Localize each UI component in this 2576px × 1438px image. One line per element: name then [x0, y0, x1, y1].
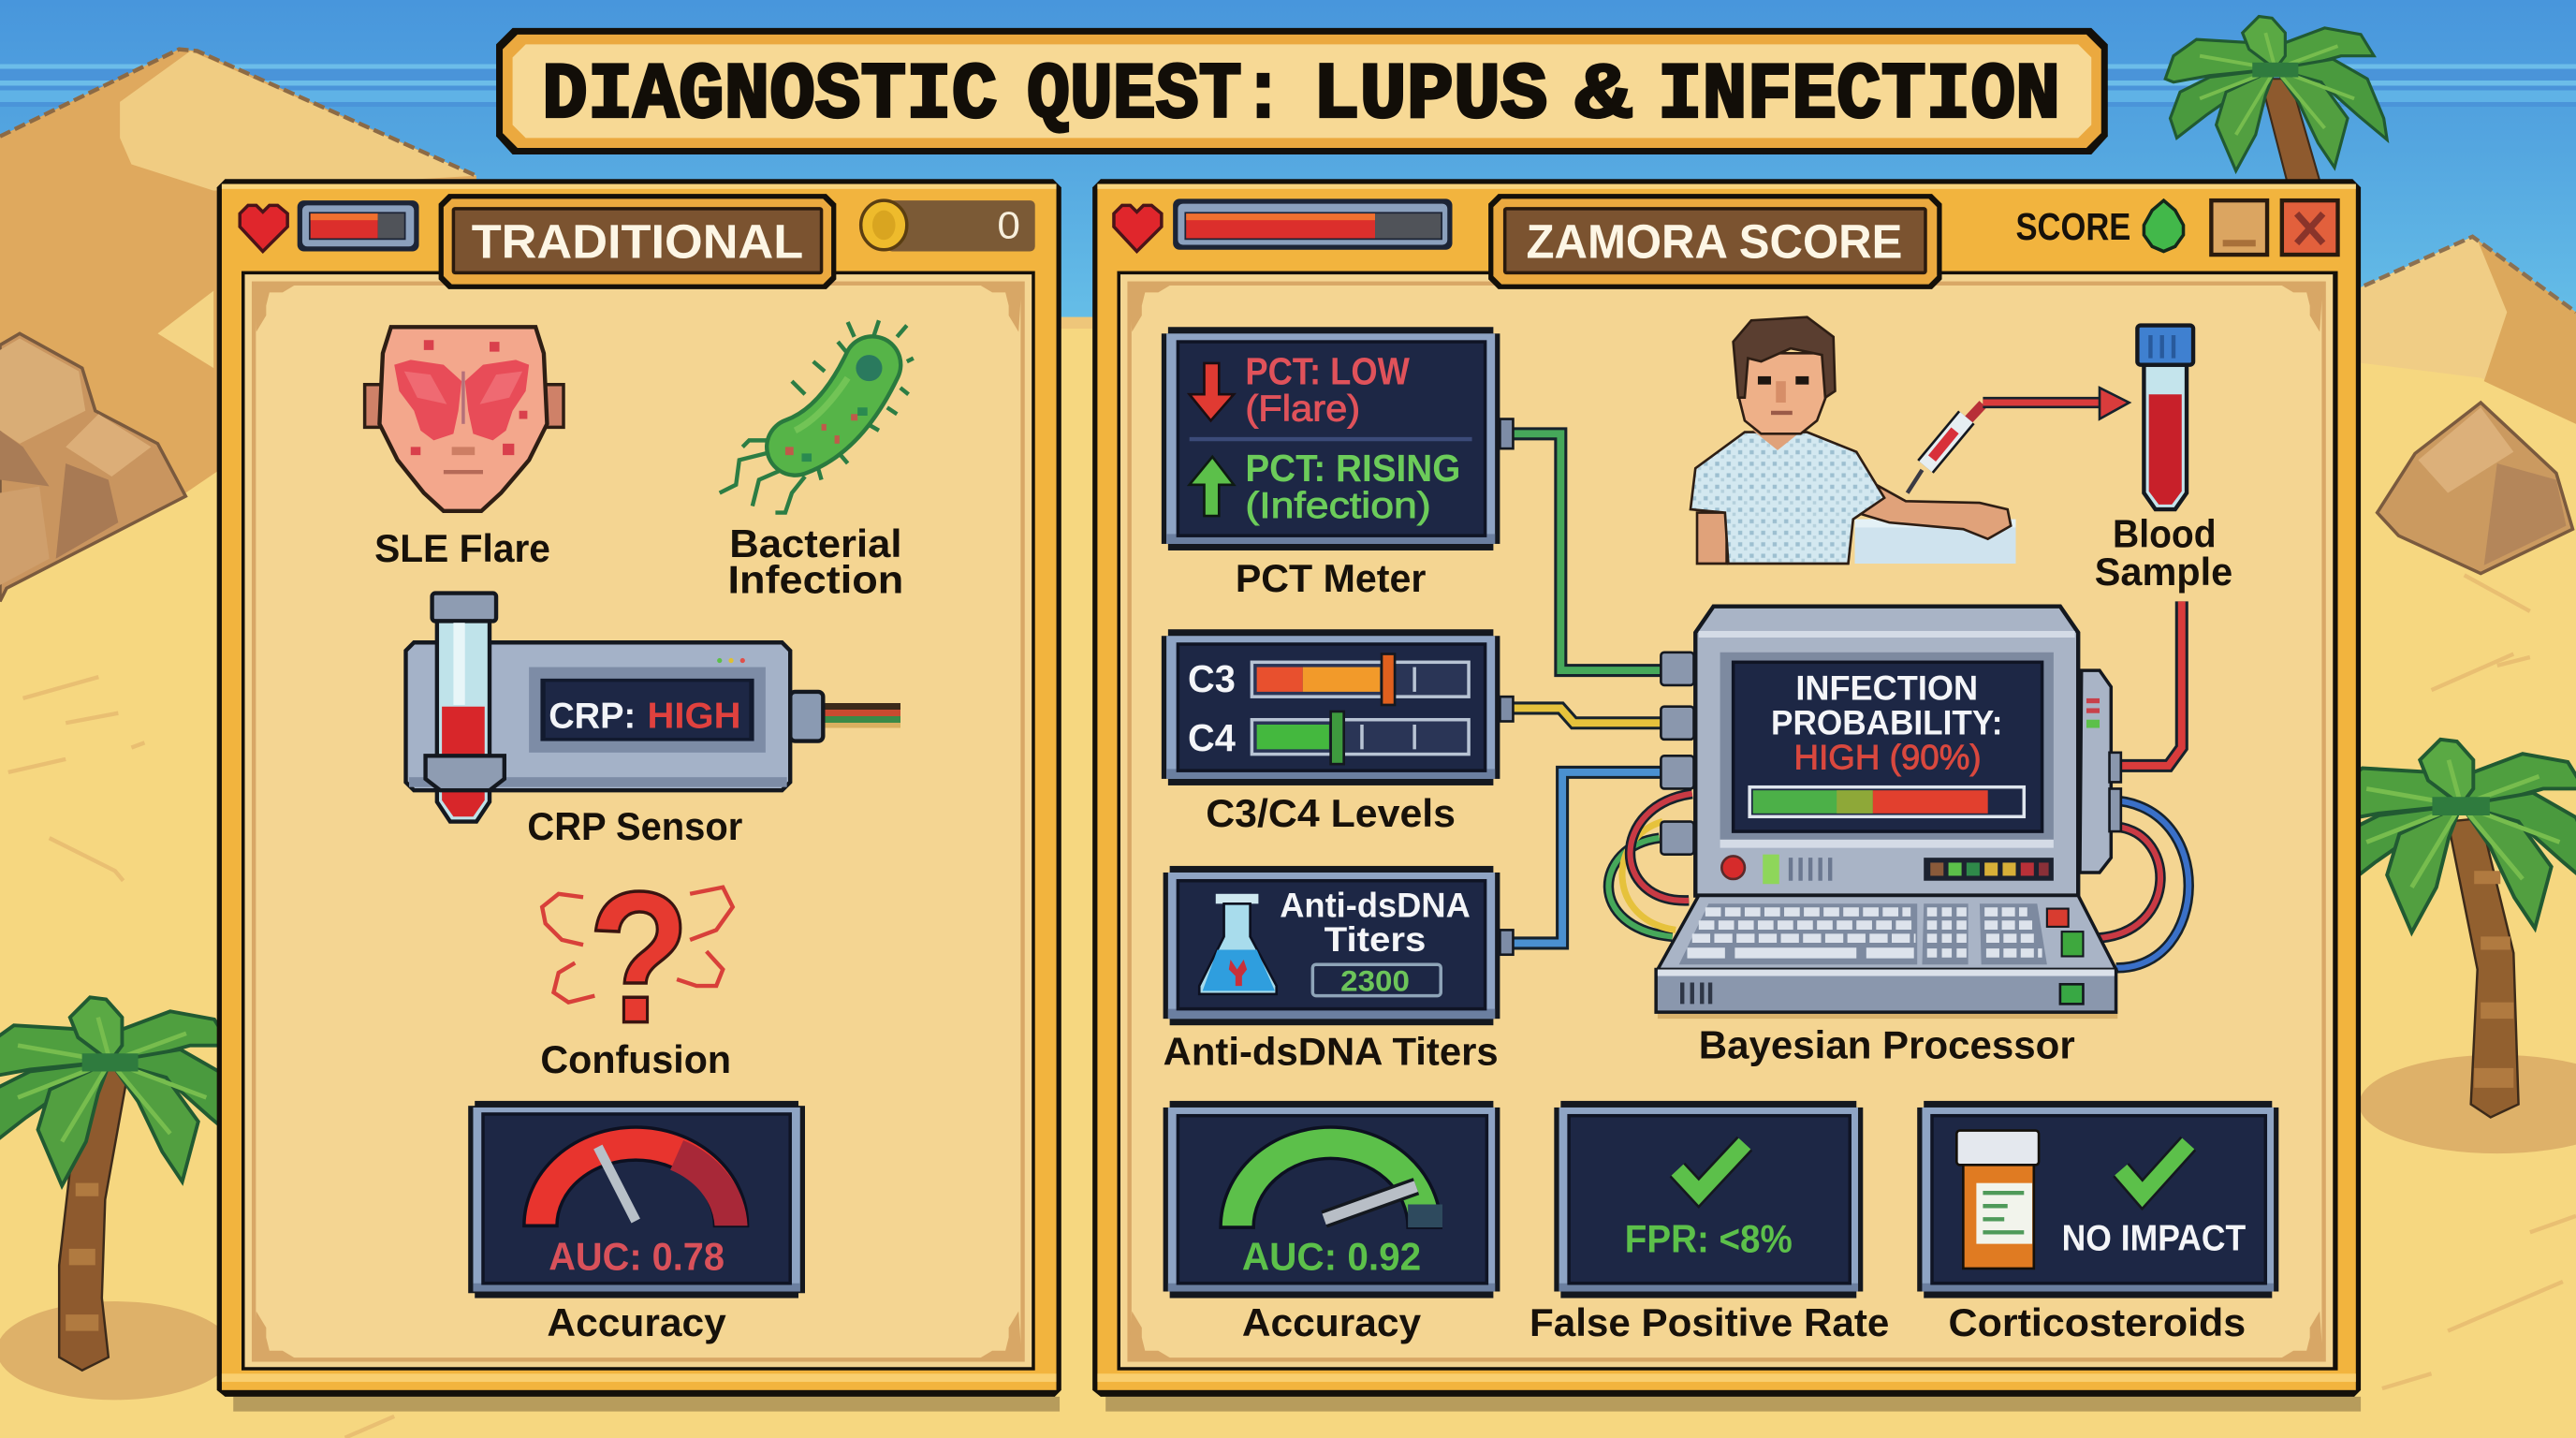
anti-dsDNA panel [1164, 866, 1513, 1025]
test tube [426, 594, 505, 822]
header: tab zamora score [1488, 194, 1942, 289]
header: coin [861, 200, 907, 250]
header: heart zamora [1114, 205, 1162, 252]
label: PCT Meter: PCT Meter [1236, 556, 1426, 600]
wires to processor [1513, 433, 2188, 968]
sensor wires [822, 703, 900, 728]
title banner [496, 28, 2108, 154]
icon: check mark [1677, 1144, 1745, 1193]
wire: blood sample red [2115, 601, 2182, 766]
icon: SLE face with butterfly rash [365, 327, 564, 511]
readout FPR: FPR: <8% [1625, 1216, 1793, 1260]
header: tab traditional [439, 194, 836, 289]
panel: corticosteroids [1917, 1101, 2278, 1299]
icon: flask [1199, 894, 1277, 994]
icon: blood sample tube [2137, 326, 2193, 509]
text: PCT low: PCT: LOW [1245, 350, 1411, 393]
header: health bar zamora [1173, 198, 1453, 250]
side unit [2080, 670, 2111, 873]
wire: C3/C4 yellow [1513, 708, 1662, 723]
arrow: PCT rising up [1190, 457, 1234, 516]
text: anti-dsDNA titers: Titers [1325, 920, 1426, 959]
panel frame: traditional [217, 179, 1061, 1412]
tab text traditional: TRADITIONAL [472, 215, 803, 269]
tab text zamora: ZAMORA SCORE [1526, 215, 1902, 269]
panel frame: zamora [1092, 179, 2361, 1412]
label: Bayesian Processor: Bayesian Processor [1699, 1022, 2075, 1066]
label C4: C4 [1188, 716, 1236, 759]
label: SLE Flare: SLE Flare [374, 526, 550, 570]
label: Blood Sample: Blood [2113, 511, 2217, 555]
label: Accuracy traditional: Accuracy [547, 1300, 726, 1344]
icon: confusion question mark: ? [588, 854, 690, 1063]
gauge panel: AUC 0.92 [1164, 1101, 1500, 1299]
label: Bacterial Infection: Infection [728, 558, 903, 602]
text: anti-dsDNA titers: Anti-dsDNA [1280, 886, 1471, 924]
monitor [1695, 607, 2078, 896]
background: sand ground [0, 317, 2576, 1438]
panel: false positive rate [1554, 1101, 1863, 1299]
control strip [1721, 855, 2054, 884]
screen text: infection probability: HIGH (90%) [1794, 738, 1982, 776]
wire: PCT green [1513, 433, 1662, 670]
readout 2300: 2300 [1340, 963, 1410, 997]
header: score label: SCORE [2016, 205, 2130, 248]
screen text: infection probability [1771, 669, 2002, 776]
computer base [1656, 970, 2116, 1012]
label: Bacterial Infection: Bacterial [729, 521, 902, 565]
background: left rocks [0, 333, 185, 601]
background: dune gap strip [1060, 317, 1092, 329]
label: Bacterial Infection [728, 521, 903, 602]
label: False Positive Rate: False Positive Rate [1530, 1300, 1889, 1344]
text: no impact: NO IMPACT [2062, 1219, 2247, 1259]
slider C3 [1251, 654, 1469, 705]
CRP readout [549, 697, 741, 737]
title text: INFECTION [1658, 52, 2060, 141]
label: Blood Sample: Sample [2095, 550, 2232, 594]
wire loops: right [2097, 800, 2188, 968]
title text: QUEST: [1027, 52, 1284, 141]
label: Anti-dsDNA Titers: Anti-dsDNA Titers [1164, 1029, 1499, 1073]
title text: & [1575, 52, 1632, 141]
button: close [2282, 200, 2338, 255]
label: Blood Sample [2095, 511, 2232, 594]
Bayesian processor computer [1656, 607, 2121, 1019]
gauge panel: AUC 0.78 [468, 1101, 805, 1299]
text: PCT low: (Flare) [1245, 389, 1360, 429]
header: score bar [887, 200, 1035, 252]
illustration: patient [1690, 317, 2016, 564]
background: sky [0, 0, 2576, 329]
background: sand streaks [8, 575, 2576, 1438]
probability bar [1749, 787, 2024, 816]
button: minimize [2211, 200, 2267, 255]
CRP readout: CRP: [549, 697, 636, 737]
text: anti-dsDNA titers [1280, 886, 1471, 959]
keyboard [1658, 896, 2116, 970]
background: horizon stripes [0, 64, 2576, 107]
title text: DIAGNOSTIC [542, 52, 997, 141]
panel: traditional [217, 179, 1061, 1412]
connectors [1661, 653, 2121, 855]
icon: green gem [2144, 200, 2184, 252]
score value: 0 [997, 203, 1020, 246]
label: Accuracy zamora: Accuracy [1242, 1300, 1422, 1344]
icon: confusion question mark [542, 854, 733, 1063]
label: C3/C4 Levels: C3/C4 Levels [1206, 791, 1456, 835]
wire: anti-dsDNA blue [1513, 772, 1662, 943]
background: left dune [0, 50, 476, 592]
wire loops: left [1608, 794, 1692, 936]
background: right dune [2349, 237, 2576, 424]
readout AUC 0.78: AUC: 0.78 [549, 1235, 724, 1279]
panel: zamora score [1092, 179, 2361, 1412]
palm tree: top right [2165, 17, 2387, 181]
header: heart [240, 205, 287, 252]
icon: pill bottle [1956, 1131, 2039, 1269]
arrow: PCT low down [1190, 363, 1234, 420]
palm tree: right [2323, 740, 2576, 1153]
label: Confusion: Confusion [540, 1037, 731, 1081]
PCT meter panel [1162, 327, 1513, 550]
readout AUC 0.92: AUC: 0.92 [1242, 1235, 1421, 1279]
icon: bacterium [720, 320, 914, 513]
header: health bar [298, 200, 419, 252]
title text [542, 52, 2060, 141]
screen text: infection probability: INFECTION [1795, 669, 1978, 708]
text: PCT rising: PCT: RISING [1245, 447, 1460, 490]
slider C4 [1251, 712, 1469, 764]
C3/C4 panel [1162, 629, 1513, 785]
label: CRP Sensor: CRP Sensor [527, 804, 742, 848]
readout 2300 [1312, 963, 1441, 997]
background: right rock [2378, 403, 2572, 574]
CRP readout: HIGH [648, 697, 741, 737]
arrow: blood flow to sample [1983, 388, 2130, 419]
palm tree: left [0, 997, 246, 1400]
icon: syringe [1908, 404, 1983, 493]
title text: LUPUS [1312, 52, 1547, 141]
icon: CRP sensor [406, 594, 900, 822]
screen text: infection probability: PROBABILITY: [1771, 704, 2002, 742]
text: PCT low [1245, 350, 1411, 429]
text: PCT rising [1245, 447, 1460, 526]
text: PCT rising: (Infection) [1245, 486, 1431, 526]
label: Corticosteroids: Corticosteroids [1949, 1300, 2246, 1344]
label C3: C3 [1188, 657, 1236, 700]
icon: check mark corticosteroids [2121, 1144, 2188, 1195]
